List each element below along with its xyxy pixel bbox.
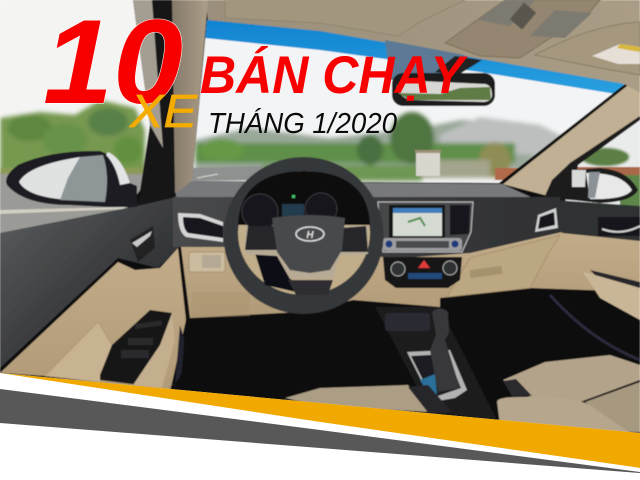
window switch panel: [100, 310, 172, 385]
bottom stripes: [0, 373, 640, 473]
center stack: [378, 202, 473, 288]
overhead console: [445, 0, 640, 75]
right vent: [535, 208, 558, 232]
headliner and roof: [172, 0, 640, 92]
right door upper: [555, 200, 640, 241]
left side window view: [0, 0, 155, 237]
stack frame: [378, 202, 473, 252]
navigation screen: [389, 205, 445, 238]
button row: [383, 238, 462, 251]
left door: [0, 197, 178, 368]
dashboard top surface: [176, 181, 533, 198]
rear-view mirror: [385, 40, 495, 106]
wheel hub: [272, 215, 345, 273]
right door handle: [598, 217, 640, 236]
left wheel buttons: [245, 226, 278, 250]
subtitle: month: THÁNG 1/2020: [208, 107, 397, 140]
glove box: [447, 235, 560, 297]
instrument cluster: [238, 171, 370, 230]
left seat: [285, 385, 430, 412]
gray stripe: [0, 389, 640, 473]
wheel silver spokes: [245, 226, 368, 279]
rim at lower spoke: [272, 292, 345, 308]
steering wheel: [224, 157, 384, 314]
left mirror: [6, 151, 137, 207]
lower wheel opening: [255, 254, 295, 292]
left door beige panel: [0, 248, 186, 392]
dashboard dark panel: [173, 197, 562, 258]
gear console: [375, 307, 497, 420]
title: XE: XE: [129, 85, 198, 137]
footwell: [182, 296, 637, 409]
right wheel buttons: [341, 226, 368, 252]
left vent: [178, 213, 223, 242]
windshield view: [190, 15, 630, 190]
right A-pillar: [502, 84, 640, 197]
center vent: [450, 205, 470, 235]
lower dash beige: [181, 232, 640, 318]
white stripe: [0, 375, 640, 472]
climate controls: [383, 257, 462, 288]
A-pillar: [172, 0, 208, 193]
sun visor: [225, 0, 465, 36]
door handle: [130, 226, 155, 262]
right side window view: [564, 119, 640, 207]
right door armrest: [583, 272, 640, 320]
right mirror: [572, 168, 638, 203]
hub logo: [296, 227, 324, 241]
yellow stripe: [0, 373, 640, 468]
right door strap: [550, 295, 640, 360]
left dash switch pad: [189, 252, 225, 272]
gear lever: [430, 308, 460, 392]
right seat: [497, 355, 640, 433]
hub logo: H: [306, 230, 314, 241]
title: BÁN CHẠY: BÁN CHẠY: [200, 45, 468, 105]
left black window frame: [137, 0, 176, 206]
